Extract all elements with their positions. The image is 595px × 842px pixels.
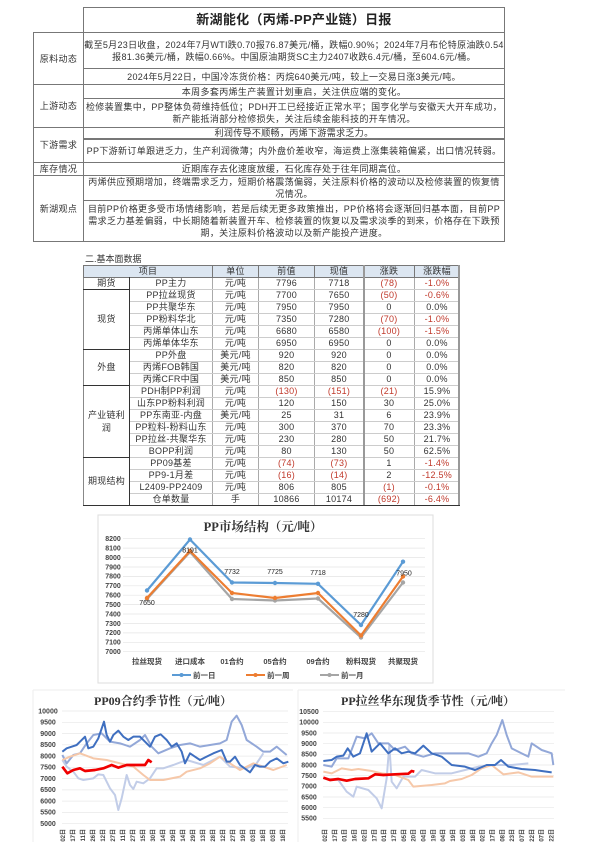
chart title: PP市场结构（元/吨）: [204, 519, 322, 534]
row: SE Asia spread: 25: [281, 410, 292, 420]
text: propane price: 2024年5月22日，中国冷冻货价格：丙烷640美元/吨，较上一交易日涨3美元/吨。: [127, 72, 461, 82]
y axis labels: 8000: [40, 753, 56, 760]
row: L-PP spread: L2409-PP2409: [139, 482, 203, 492]
y axis labels: 7500: [105, 602, 121, 609]
row: BOPP profit: [149, 446, 450, 456]
row: SE Asia spread: 23.9%: [424, 410, 450, 420]
table header: 涨跌幅: [423, 266, 451, 276]
row: L-PP spread: [139, 482, 449, 492]
row: propylene CFR China: [143, 374, 448, 384]
text: profit transmission: 利润传导不顺畅，丙烯下游需求乏力。: [215, 128, 373, 138]
data labels: [139, 548, 412, 619]
label: downstream: 下游需求: [40, 140, 77, 150]
row: propylene CFR China: 850: [279, 374, 294, 384]
category labels: 09合约: [306, 656, 330, 666]
row: L-PP spread: -0.1%: [425, 482, 449, 492]
row: propylene East China: [143, 338, 448, 348]
row: Shandong powder profit: 山东PP粉料利润: [137, 398, 205, 408]
row: PP9-1 spread: 2: [386, 470, 392, 480]
row: BOPP profit: 80: [281, 446, 292, 456]
y axis labels: 8100: [105, 545, 121, 552]
row: PP main: -1.0%: [425, 278, 449, 288]
y axis labels: 9500: [301, 730, 317, 737]
data labels: 7725: [267, 569, 283, 576]
title: 新湖能化（丙烯-PP产业链）日报: [196, 12, 392, 27]
y axis labels: 7100: [105, 640, 121, 647]
row: raffia-copolymer spread: 21.7%: [424, 434, 450, 444]
row: raffia-copolymer spread: [135, 434, 450, 444]
row: PP main: 期货: [97, 278, 116, 288]
row: PDH profit: 元/吨: [225, 386, 246, 396]
row: propylene FOB Korea: [143, 362, 448, 372]
row: propylene FOB Korea: 丙烯FOB韩国: [143, 362, 199, 372]
row: PP external: [97, 350, 448, 372]
chart title: PP09合约季节性（元/吨）: [94, 693, 232, 708]
text: crude oil update: 报81.36美元/桶，跌幅0.66%。中国原油期货SC主力2407收跌6.4元/桶，至604.6元/桶。: [112, 52, 476, 62]
y axis labels: 7900: [105, 564, 121, 571]
row: PP raffia spot: 7700: [276, 290, 297, 300]
y axis labels: 7000: [301, 784, 317, 791]
text: upstream maintenance: 检修装置集中，PP整体负荷维持低位；PDH开工已经接近正常水平；国亨化学与安徽天大开车成功，: [86, 102, 502, 112]
label: downstream: [33, 127, 84, 163]
row: pellet-powder spread: PP粒料-粉料山东: [135, 422, 207, 432]
label: Xinhu view: [33, 175, 84, 242]
row: PP powder: (70): [380, 314, 398, 324]
row: pellet-powder spread: 70: [384, 422, 394, 432]
row: raffia-copolymer spread: 280: [331, 434, 347, 444]
text: view short term: [83, 175, 505, 201]
y axis labels: 6000: [301, 805, 317, 812]
row: PP external: 0.0%: [426, 350, 448, 360]
category labels: 共聚现货: [388, 656, 418, 666]
row: PP main: (78): [380, 278, 398, 288]
row: PP copolymer: PP共聚华东: [146, 302, 196, 312]
row: PP09 basis: -1.4%: [425, 458, 449, 468]
row: L-PP spread: (1): [383, 482, 395, 492]
row: PP powder: [146, 314, 449, 324]
row: PP copolymer: 0.0%: [426, 302, 448, 312]
series: previous day: [145, 537, 405, 627]
table header: 涨跌: [380, 266, 398, 276]
row: warehouse receipts: 10174: [326, 494, 352, 504]
row: propylene CFR China: 0: [386, 374, 392, 384]
row: propylene Shandong: 丙烯单体山东: [143, 326, 199, 336]
data labels: 7650: [139, 600, 155, 607]
category labels: 粉料现货: [346, 656, 376, 666]
row: PP raffia spot: (50): [380, 290, 398, 300]
panel: daily report summary table: [33, 7, 505, 242]
category labels: 拉丝现货: [132, 656, 162, 666]
chart: PP market structure: [98, 515, 433, 683]
label: inventory: [33, 162, 84, 176]
category labels: 01合约: [220, 656, 244, 666]
row: raffia-copolymer spread: 230: [279, 434, 294, 444]
row: propylene FOB Korea: 820: [279, 362, 294, 372]
row: propylene East China: 6950: [328, 338, 350, 348]
row: Shandong powder profit: 120: [279, 398, 294, 408]
title: [83, 7, 505, 33]
chart: PP raffia East China spot seasonality: [298, 690, 565, 842]
row: PP copolymer: 元/吨: [225, 302, 246, 312]
y axis labels: 10500: [299, 709, 319, 716]
series: previous month: [145, 550, 405, 640]
row: PP powder: 7280: [328, 314, 350, 324]
row: PP main: PP主力: [156, 278, 187, 288]
label: upstream: [33, 84, 84, 128]
row: PP9-1 spread: PP9-1月差: [149, 470, 193, 480]
row: PP main: [97, 278, 449, 288]
row: PP raffia spot: 7650: [328, 290, 350, 300]
series: lightest blue year: [323, 745, 528, 808]
row: PP external: 美元/吨: [220, 350, 251, 360]
series: mid blue year: [62, 716, 287, 763]
row: SE Asia spread: [140, 410, 450, 420]
y axis labels: 9000: [301, 741, 317, 748]
row: Shandong powder profit: 元/吨: [225, 398, 246, 408]
series: peach year: [323, 765, 553, 787]
text: upstream restart: 本周多套丙烯生产装置计划重启，关注供应端的变化。: [182, 86, 406, 96]
row: propylene East China: 6950: [276, 338, 297, 348]
category labels: [132, 656, 418, 666]
y axis labels: 5500: [301, 816, 317, 823]
table header: 期现结构: [88, 476, 125, 486]
y axis labels: 7000: [105, 649, 121, 656]
row: pellet-powder spread: 23.3%: [424, 422, 450, 432]
x axis date labels: [60, 829, 287, 842]
row: propylene Shandong: (100): [378, 326, 400, 336]
row: PP external: 920: [279, 350, 294, 360]
legend: [172, 670, 364, 680]
text: view medium term: [83, 200, 505, 242]
row: Shandong powder profit: 25.0%: [424, 398, 450, 408]
row: propylene Shandong: 元/吨: [225, 326, 246, 336]
text: inventory: 近期库存去化速度放缓，石化库存处于往年同期高位。: [182, 164, 406, 174]
row: PDH profit: (130): [275, 386, 298, 396]
data labels: 7732: [224, 569, 240, 576]
row: PDH profit: PDH制PP利润: [141, 386, 201, 396]
table header: [84, 266, 458, 504]
text: crude oil update: 截至5月23日收盘，2024年7月WTI跌0.70报76.87美元/桶，跌幅0.90%；2024年7月布伦特原油跌0.54: [84, 40, 504, 50]
row: BOPP profit: 元/吨: [225, 446, 246, 456]
row: PP raffia spot: 元/吨: [225, 290, 246, 300]
series: mid blue year: [323, 720, 553, 767]
row: raffia-copolymer spread: PP拉丝-共聚华东: [135, 434, 207, 444]
row: L-PP spread: 805: [331, 482, 347, 492]
y axis labels: 8000: [105, 555, 121, 562]
row: SE Asia spread: 6: [386, 410, 392, 420]
row: PP9-1 spread: (14): [330, 470, 348, 480]
row: propylene East China: 丙烯单体华东: [143, 338, 199, 348]
row: BOPP profit: BOPP利润: [149, 446, 193, 456]
row: raffia-copolymer spread: 元/吨: [225, 434, 246, 444]
label: raw materials: [33, 32, 84, 85]
y axis labels: 8000: [301, 762, 317, 769]
row: Shandong powder profit: 150: [331, 398, 347, 408]
chart title: PP拉丝华东现货季节性（元/吨）: [341, 693, 515, 708]
legend: 前一月: [341, 670, 364, 680]
row: propylene East China: 0: [386, 338, 392, 348]
label: raw materials: 原料动态: [40, 54, 77, 64]
row: PP external: 0: [386, 350, 392, 360]
y axis labels: 8500: [40, 742, 56, 749]
y axis labels: 7700: [105, 583, 121, 590]
table header: 单位: [226, 266, 245, 276]
y axis labels: 8500: [301, 752, 317, 759]
y axis labels: 7400: [105, 611, 121, 618]
row: propylene FOB Korea: 美元/吨: [220, 362, 251, 372]
heading: fundamentals: 二.基本面数据: [85, 254, 142, 264]
text: crude oil update: [83, 32, 505, 69]
row: propylene Shandong: 6680: [276, 326, 297, 336]
row: PP raffia spot: [97, 290, 449, 324]
text: view short term: 丙烯供应预期增加，终端需求乏力，短期价格震荡偏弱，关注原料价格的波动以及检修装置的恢复情: [88, 177, 500, 187]
y axis labels: 10000: [38, 708, 58, 715]
row: propylene CFR China: 850: [331, 374, 347, 384]
row: pellet-powder spread: 300: [279, 422, 294, 432]
row: PP main: 元/吨: [225, 278, 246, 288]
row: SE Asia spread: PP东南亚-内盘: [140, 410, 202, 420]
text: upstream maintenance: 新产能抵消部分检修损失，关注后续金能科技的开车情况。: [172, 114, 416, 124]
row: Shandong powder profit: 30: [384, 398, 394, 408]
data labels: 7718: [310, 570, 326, 577]
row: propylene CFR China: 0.0%: [426, 374, 448, 384]
row: Shandong powder profit: [137, 398, 450, 408]
row: warehouse receipts: -6.4%: [425, 494, 449, 504]
y axis labels: 9500: [40, 720, 56, 727]
text: profit transmission: [83, 127, 505, 139]
row: warehouse receipts: [152, 494, 449, 504]
table header: 外盘: [97, 362, 116, 372]
text: upstream restart: [83, 84, 505, 99]
row: BOPP profit: 62.5%: [424, 446, 450, 456]
data labels: 7280: [353, 612, 369, 619]
row: PP09 basis: (73): [330, 458, 348, 468]
row: L-PP spread: 元/吨: [225, 482, 246, 492]
y axis labels: 7600: [105, 592, 121, 600]
row: PP09 basis: (74): [278, 458, 295, 468]
row: PP main: 7718: [328, 278, 350, 288]
row: SE Asia spread: 31: [334, 410, 344, 420]
y axis labels: 6000: [40, 798, 56, 805]
row: propylene FOB Korea: 820: [331, 362, 347, 372]
y axis labels: 9000: [40, 731, 56, 738]
row: PP copolymer: 7950: [328, 302, 350, 312]
table header: 项目: [139, 266, 157, 276]
row: BOPP profit: 50: [384, 446, 394, 456]
label: Xinhu view: 新湖观点: [40, 204, 77, 214]
y axis labels: 7000: [40, 776, 56, 783]
label: upstream: 上游动态: [40, 101, 77, 111]
y axis labels: 10000: [299, 720, 319, 727]
text: view short term: 况情况。: [275, 189, 313, 199]
row: warehouse receipts: (692): [378, 494, 400, 504]
row: PP raffia spot: -0.6%: [425, 290, 449, 300]
legend: 前一周: [267, 670, 290, 680]
row: propylene FOB Korea: 0.0%: [426, 362, 448, 372]
text: view medium term: 需求乏力基差偏弱，中长期随着新装置开车、检修装置的恢复以及需求淡季的到来，价格存在下跌预: [88, 216, 500, 226]
row: propylene Shandong: -1.5%: [425, 326, 449, 336]
row: PP09 basis: [88, 458, 449, 486]
row: pellet-powder spread: 元/吨: [225, 422, 246, 432]
row: raffia-copolymer spread: 50: [384, 434, 394, 444]
row: warehouse receipts: 10866: [273, 494, 300, 504]
data labels: 7950: [396, 570, 412, 578]
row: PP powder: 7350: [276, 314, 297, 324]
y axis labels: 5000: [40, 821, 56, 828]
row: PP9-1 spread: [149, 470, 452, 480]
row: PP copolymer: 0: [386, 302, 392, 312]
row: PDH profit: [88, 386, 450, 432]
y axis labels: [299, 709, 319, 823]
row: L-PP spread: 806: [279, 482, 294, 492]
fundamentals data table: [83, 265, 460, 506]
x axis date labels: [322, 829, 556, 842]
text: downstream orders: [83, 138, 505, 163]
row: PDH profit: 15.9%: [424, 386, 450, 396]
series: lightest blue year: [62, 753, 263, 810]
y axis labels: 7800: [105, 574, 121, 581]
series: current year red: [323, 771, 414, 781]
y axis labels: 6500: [40, 787, 56, 794]
y axis labels: [105, 536, 121, 656]
row: warehouse receipts: 手: [231, 494, 240, 504]
text: inventory: [83, 162, 505, 176]
table header: 前值: [277, 266, 296, 276]
y axis labels: 7500: [40, 765, 56, 772]
y axis labels: 7200: [105, 630, 121, 637]
series: dark blue year: [62, 722, 288, 772]
series: peach year: [62, 753, 287, 780]
row: PP powder: -1.0%: [425, 314, 449, 324]
row: propylene Shandong: [143, 326, 449, 336]
category labels: 05合约: [263, 656, 287, 666]
text: upstream maintenance: [83, 98, 505, 128]
row: PP powder: PP粉料华北: [146, 314, 196, 324]
row: PP copolymer: [146, 302, 448, 312]
row: propylene CFR China: 美元/吨: [220, 374, 251, 384]
row: PP09 basis: 元/吨: [225, 458, 246, 468]
data labels: 8191: [182, 548, 198, 554]
label: inventory: 库存情况: [40, 164, 77, 174]
row: pellet-powder spread: [135, 422, 450, 432]
chart: PP09 contract seasonality: [33, 690, 293, 842]
row: PP09 basis: PP09基差: [150, 458, 192, 468]
series: dark blue year: [323, 733, 552, 772]
text: view medium term: 目前PP价格更多受市场情绪影响，若是后续无更多政策推出，PP价格将会逐渐回归基本面，目前PP: [88, 204, 500, 214]
y axis labels: 8200: [105, 536, 121, 543]
table header: 现值: [330, 266, 348, 276]
row: PP raffia spot: PP拉丝现货: [146, 290, 196, 300]
row: PP external: PP外盘: [156, 350, 187, 360]
y axis labels: 7300: [105, 621, 121, 628]
row: warehouse receipts: 仓单数量: [152, 494, 190, 504]
y axis labels: 6500: [301, 794, 317, 801]
series: current year red: [62, 760, 152, 773]
row: propylene FOB Korea: 0: [386, 362, 392, 372]
table header: 产业链利润: [88, 410, 125, 432]
row: propylene East China: 元/吨: [225, 338, 246, 348]
row: PP9-1 spread: -12.5%: [422, 470, 452, 480]
series: previous week: [145, 549, 405, 638]
text: view medium term: 期，关注原料价格波动以及新产能投产进度。: [200, 228, 388, 238]
row: PDH profit: (21): [380, 386, 398, 396]
y axis labels: 5500: [40, 810, 56, 817]
row: propylene Shandong: 6580: [328, 326, 350, 336]
text: downstream orders: PP下游新订单跟进乏力，生产利润微薄；内外盘价差收窄，海运费上涨集装箱偏紧，出口情况转弱。: [87, 146, 501, 156]
y axis labels: [38, 708, 58, 828]
row: PP09 basis: 1: [386, 458, 392, 468]
row: propylene CFR China: 丙烯CFR中国: [143, 374, 199, 384]
row: PP9-1 spread: 元/吨: [225, 470, 246, 480]
category labels: 进口成本: [175, 656, 205, 666]
row: propylene East China: 0.0%: [426, 338, 448, 348]
row: pellet-powder spread: 370: [331, 422, 347, 432]
row: PDH profit: (151): [328, 386, 350, 396]
row: PP external: 920: [331, 350, 347, 360]
row: PP powder: 元/吨: [225, 314, 246, 324]
row: PP9-1 spread: (16): [278, 470, 295, 480]
row: SE Asia spread: 美元/吨: [220, 410, 251, 420]
legend: 前一日: [193, 670, 216, 680]
text: propane price: [83, 68, 505, 85]
y axis labels: 7500: [301, 773, 317, 780]
row: PP copolymer: 7950: [276, 302, 297, 312]
table header: 现货: [97, 314, 116, 324]
row: BOPP profit: 130: [331, 446, 347, 456]
row: PP main: 7796: [276, 278, 297, 288]
